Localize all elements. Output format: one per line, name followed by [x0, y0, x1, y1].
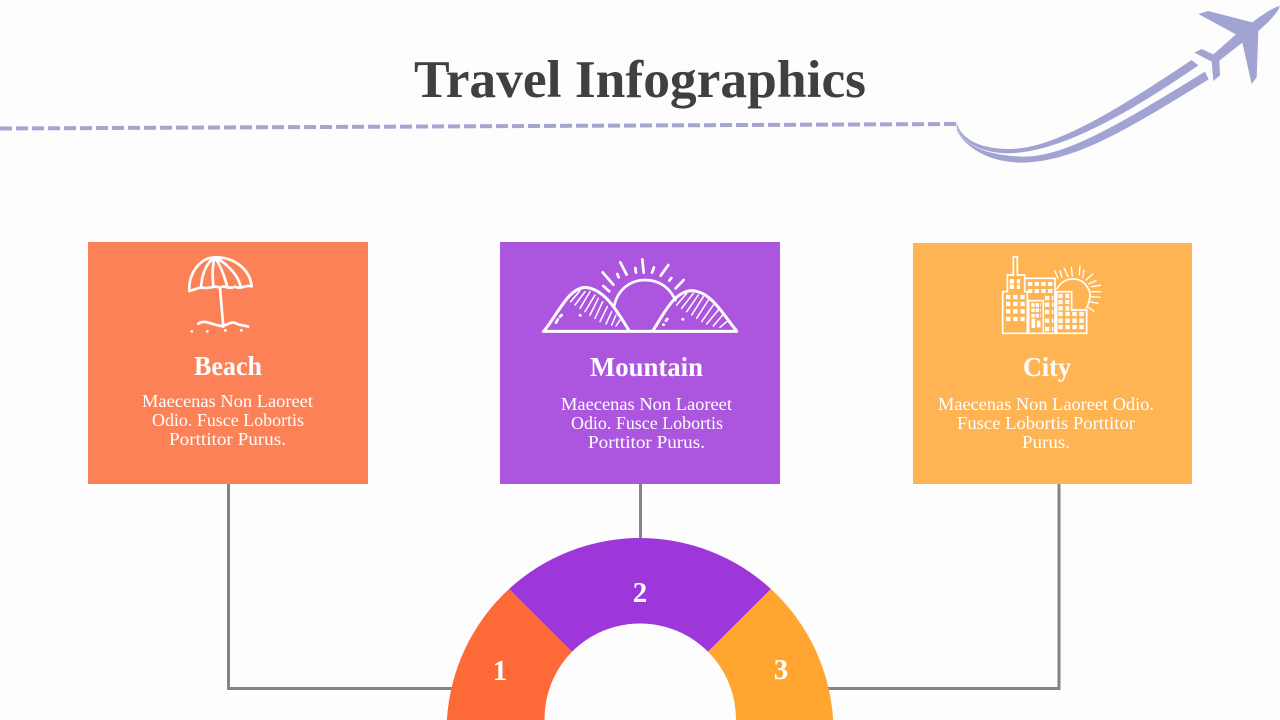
- segment 2: 2: [633, 577, 647, 609]
- text: beach description: Odio. Fusce Lobortis: [152, 410, 304, 430]
- text: city description: Maecenas Non Laoreet Odio.: [938, 394, 1154, 414]
- icon: beach umbrella: [189, 257, 252, 331]
- segment 1: [447, 589, 572, 720]
- icon: airplane with trail: [957, 6, 1279, 163]
- chart: numbered semicircle: [447, 538, 833, 720]
- text: city description: Fusce Lobortis Porttitor: [957, 413, 1135, 433]
- text: beach description: Maecenas Non Laoreet: [142, 391, 313, 411]
- text: mountain description: Porttitor Purus.: [588, 432, 705, 452]
- connector lines: [228, 484, 1059, 688]
- title: Travel Infographics: [414, 51, 866, 109]
- segment 2: [509, 538, 771, 652]
- text: mountain description: Maecenas Non Laoreet: [561, 394, 732, 414]
- panel: beach: [88, 242, 368, 484]
- segment 3: [708, 589, 833, 720]
- panel: mountain: [500, 242, 780, 484]
- text: mountain description: Odio. Fusce Lobortis: [571, 413, 723, 433]
- heading: mountain: Mountain: [590, 352, 703, 382]
- heading: beach: Beach: [194, 351, 262, 381]
- icon: mountains and sun: [543, 259, 737, 331]
- segment 3: 3: [774, 654, 788, 686]
- text: beach description: [142, 391, 313, 449]
- text: beach description: Porttitor Purus.: [169, 429, 286, 449]
- text: city description: [938, 394, 1154, 452]
- dashed flight path: [0, 124, 957, 128]
- text: mountain description: [561, 394, 732, 452]
- segment 1: 1: [493, 655, 507, 687]
- icon: city skyline and sun: [1003, 257, 1101, 333]
- panel: city: [913, 243, 1192, 484]
- heading: city: City: [1023, 352, 1071, 382]
- text: city description: Purus.: [1022, 432, 1070, 452]
